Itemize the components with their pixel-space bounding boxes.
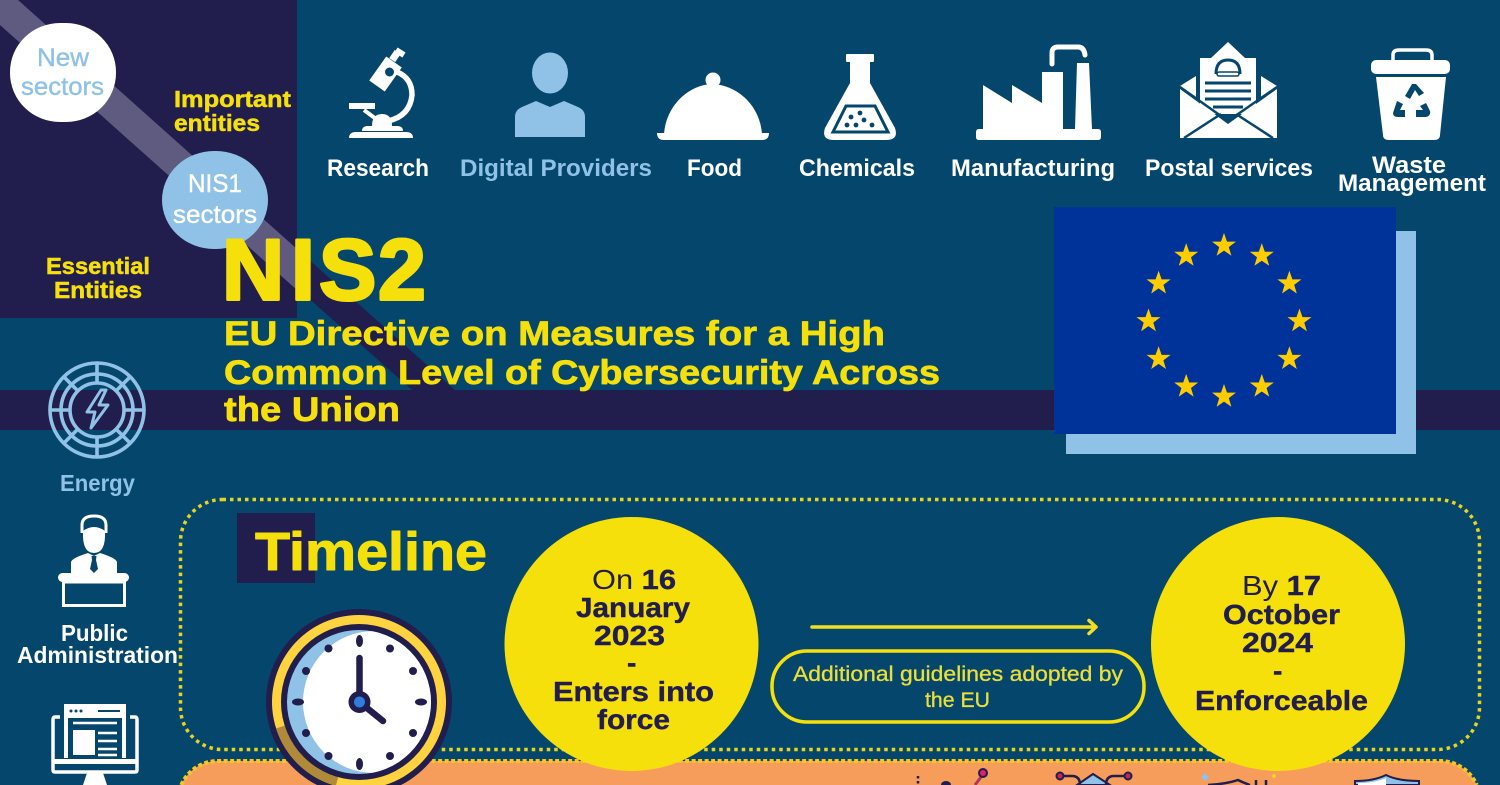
subtitle: the Union [224,391,400,429]
milestone: 17 October 2024: October [1223,599,1340,630]
milestone: 16 January 2023: Enters into [553,676,714,707]
title block [222,222,940,429]
sector: waste management: Waste [1372,152,1446,179]
milestone: 17 October 2024: - [1273,655,1282,686]
label: essential entities: Entities [54,277,142,303]
sector: waste management [1338,50,1486,197]
label: important entities: entities [174,110,260,136]
sector: public administration: Public [61,620,128,646]
subtitle: Common Level of Cybersecurity Across [224,354,940,392]
subtitle [224,315,940,429]
label: essential entities: Essential [46,253,150,279]
callout: additional guidelines [772,651,1144,722]
milestone: 17 October 2024: Enforceable [1195,685,1368,716]
icon: sparkle badge [1201,773,1276,785]
label: important entities: Important [174,86,291,112]
milestone: 16 January 2023: force [597,704,670,735]
milestone: 16 January 2023 [504,517,758,771]
sector: manufacturing [951,47,1115,182]
panel: timeline frame [180,500,1480,750]
milestone: 17 October 2024 [1151,517,1405,771]
legend: sectors and entities [10,23,291,303]
milestone: 16 January 2023: - [627,647,636,678]
background band: horizontal navy stripe [0,390,1500,430]
callout: additional guidelines: the EU [925,689,990,712]
badge: NIS1 sectors: NIS1 [188,170,242,198]
sector: chemicals [799,54,915,182]
icon: clock [266,609,452,785]
heading: timeline: Timeline [255,522,487,582]
flag stars [1136,233,1312,407]
label: important entities [174,86,291,136]
icon: network nodes [918,769,987,785]
badge: NIS1 sectors [162,151,268,249]
sector: food [657,72,769,182]
panel: bottom orange section [181,761,1477,785]
sector: postal services [1145,42,1313,182]
background band: diagonal stripe highlighted section [0,0,297,290]
background band: diagonal stripe [0,0,455,390]
milestone: 17 October 2024: By 17 [1242,570,1321,601]
sector: energy: Energy [60,470,135,496]
milestone: 16 January 2023: 2023 [594,620,665,651]
clock ticks [292,635,427,770]
icon: connected shield [1056,772,1132,785]
badge: new sectors [10,23,116,122]
sector: food: Food [687,155,742,182]
heading: NIS2: NIS2 [222,222,426,318]
subtitle: EU Directive on Measures for a High [224,315,885,353]
sector: public administration: Administration [17,642,178,668]
sector: digital providers [460,52,652,182]
milestone: 16 January 2023: January [576,592,690,623]
sector column: left icons [17,363,178,785]
milestone: 17 October 2024: 2024 [1242,627,1313,658]
sector: postal services: Postal services [1145,155,1313,182]
sector: waste management: Management [1338,170,1486,197]
sector: research [327,50,429,182]
badge: new sectors: New [37,44,90,72]
badge: NIS1 sectors: sectors [173,201,257,229]
badge: new sectors: sectors [21,73,104,101]
background panel: top left navy block [0,0,297,318]
sector: digital providers: Digital Providers [460,155,652,182]
label: essential entities [46,253,150,303]
sector: public administration [17,516,178,668]
sector: digital infrastructure monitor icon [53,704,137,785]
icon: security shield [1355,775,1419,785]
EU flag with offset shadow [1054,207,1416,454]
callout: additional guidelines: Additional guidelines adopted by [793,663,1124,686]
arrow: timeline direction [812,620,1096,634]
sector: manufacturing: Manufacturing [951,155,1115,182]
sector: research: Research [327,155,429,182]
sector row: top icons [327,42,1486,197]
sector: chemicals: Chemicals [799,155,915,182]
milestone: 16 January 2023: On 16 [592,564,676,595]
sector: energy [50,363,144,496]
